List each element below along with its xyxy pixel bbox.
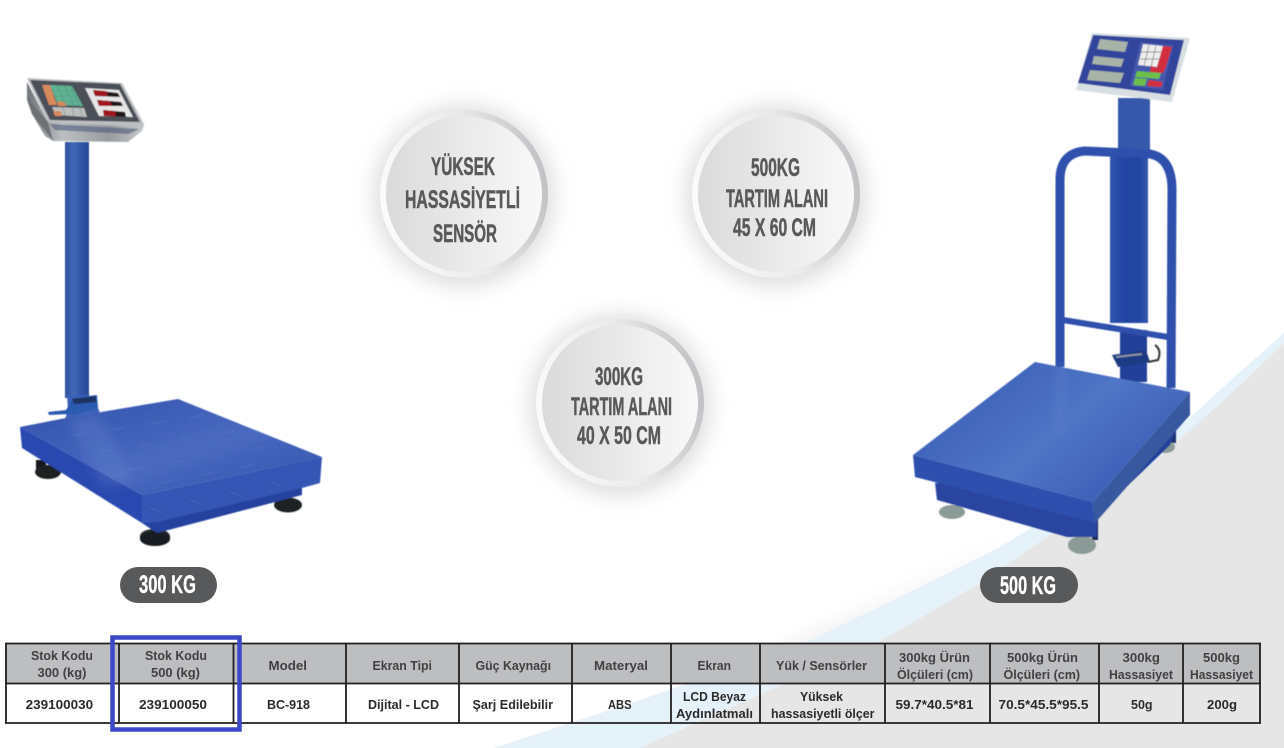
- keypad white: [52, 107, 87, 117]
- header labels: [31, 648, 1254, 682]
- badge: 500kg area: [686, 106, 866, 286]
- data row: Şarj Edilebilir: [472, 697, 553, 712]
- data row: Yüksek: [800, 689, 844, 704]
- platform front side: [142, 457, 322, 523]
- label: 300 KG: [120, 567, 217, 603]
- displays: [93, 90, 120, 97]
- platform lower body: [142, 488, 302, 533]
- label: 500 KG: 500 KG: [1000, 572, 1056, 600]
- header labels: 500kg Ürün: [1007, 650, 1078, 665]
- handle reflection on platform: [1055, 367, 1066, 440]
- badge: sensor: HASSASİYETLİ: [405, 186, 520, 214]
- header labels: Hassasiyet: [1190, 667, 1254, 682]
- header labels: Model: [268, 658, 307, 673]
- data row: BC-918: [267, 697, 310, 712]
- badge: sensor: SENSÖR: [433, 219, 497, 248]
- keypad green: [50, 85, 83, 106]
- header labels: Güç Kaynağı: [476, 658, 551, 673]
- data row: [26, 689, 1237, 721]
- badge: 500kg area: TARTIM ALANI: [726, 185, 828, 213]
- badge: 300kg area: 300KG: [595, 363, 643, 391]
- header labels: 300 (kg): [38, 665, 86, 680]
- platform top: [20, 399, 322, 495]
- lcd displays: [1097, 39, 1128, 52]
- product: 500 kg scale: [913, 33, 1190, 554]
- readout: [1076, 33, 1190, 102]
- table header band: [6, 644, 1260, 683]
- header labels: 500kg: [1203, 650, 1240, 665]
- clamp lever: [48, 395, 98, 415]
- keypad: [1130, 42, 1173, 90]
- platform right side: [1093, 392, 1190, 523]
- readout front strip: [50, 124, 140, 134]
- label: 500 KG: [980, 567, 1078, 603]
- badge: 300kg area: [530, 315, 710, 495]
- data row: ABS: [608, 697, 632, 712]
- data row: LCD Beyaz: [683, 689, 746, 704]
- foot: right: [274, 498, 302, 512]
- column base: [62, 395, 100, 428]
- platform left side: [20, 427, 142, 523]
- header labels: Ölçüleri (cm): [1004, 667, 1080, 682]
- readout face: [27, 78, 144, 127]
- badge: 300kg area: TARTIM ALANI: [571, 393, 672, 421]
- header labels: Ölçüleri (cm): [897, 667, 973, 682]
- table grid: [5, 643, 1261, 723]
- readout body: [27, 82, 144, 142]
- crossbar: [1063, 320, 1168, 337]
- column reflection on platform: [66, 413, 135, 487]
- data row: 239100050: [139, 697, 207, 712]
- platform top: [913, 362, 1190, 502]
- label: 300 KG: 300 KG: [139, 571, 196, 599]
- background swoosh: [494, 333, 1284, 748]
- clamp: [1112, 345, 1159, 367]
- foot: back left: [35, 460, 61, 479]
- data row: hassasiyetli ölçer: [771, 706, 874, 721]
- keypad lines: [51, 85, 82, 116]
- badge: sensor: [374, 106, 554, 286]
- column: [1118, 98, 1150, 153]
- data row: 200g: [1207, 697, 1237, 712]
- display panel: [85, 88, 133, 117]
- header labels: Materyal: [594, 658, 648, 673]
- foot: front: [140, 529, 170, 546]
- readout side shadow: [28, 98, 53, 141]
- data row: Aydınlatmalı: [676, 706, 753, 721]
- data row: Dijital - LCD: [368, 697, 439, 712]
- handle: [1060, 151, 1172, 388]
- header labels: Stok Kodu: [31, 648, 93, 663]
- highlight box: 500 kg stock code: [112, 638, 240, 730]
- column: [65, 142, 89, 398]
- tread pattern: [70, 415, 282, 512]
- data row: 70.5*45.5*95.5: [998, 697, 1088, 712]
- badge: 300kg area: 40 X 50 CM: [577, 422, 661, 450]
- header labels: 300kg Ürün: [899, 650, 970, 665]
- badge: sensor: YÜKSEK: [431, 152, 495, 181]
- feet: [939, 505, 965, 519]
- product: 300 kg scale: [20, 78, 322, 546]
- data row: 50g: [1131, 697, 1153, 712]
- header labels: Ekran: [698, 658, 731, 673]
- badge: 500kg area: 500KG: [751, 154, 800, 182]
- platform left side: [913, 455, 1095, 523]
- header labels: Hassasiyet: [1109, 667, 1174, 682]
- header labels: Yük / Sensörler: [776, 658, 867, 673]
- header labels: 300kg: [1122, 650, 1160, 665]
- lower body: [935, 480, 1097, 537]
- data row: 239100030: [26, 697, 93, 712]
- specification table: [5, 643, 1261, 723]
- data row: 59.7*40.5*81: [896, 697, 974, 712]
- header labels: 500 (kg): [151, 665, 200, 680]
- header labels: Stok Kodu: [145, 648, 207, 663]
- badge: 500kg area: 45 X 60 CM: [733, 214, 816, 242]
- keypad orange: [42, 85, 57, 105]
- header labels: Ekran Tipi: [372, 658, 432, 673]
